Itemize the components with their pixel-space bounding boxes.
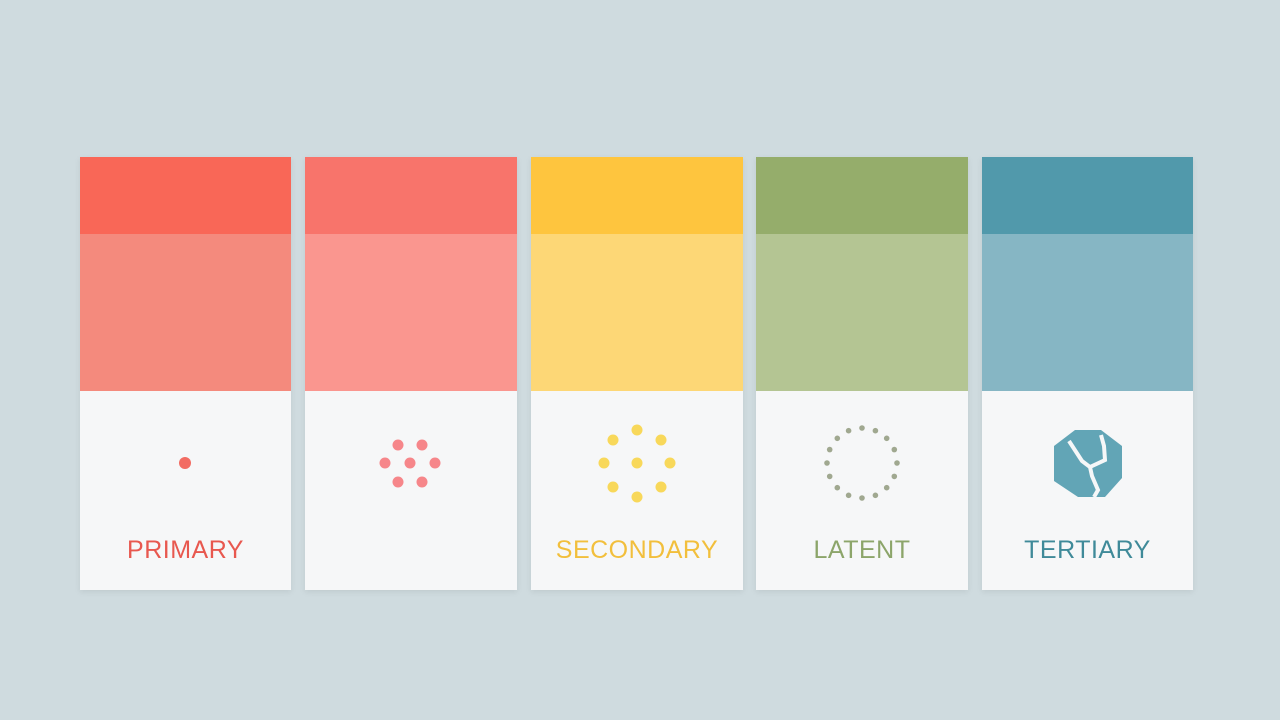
icon: latent dotted ring [824,425,900,501]
card: latent [756,157,968,590]
label: secondary: SECONDARY [556,536,718,564]
label: primary: PRIMARY [127,536,244,564]
icon: cluster of pink dots [380,440,440,488]
icon: cracked octagon [1054,430,1122,497]
card: second [305,157,517,590]
icon: single dot [179,457,191,469]
label: latent: LATENT [814,536,910,564]
card: tertiary [982,157,1193,590]
icon: yellow ring of dots [598,424,676,502]
card: primary [80,157,291,590]
card: secondary [531,157,743,590]
label: tertiary: TERTIARY [1024,536,1151,564]
